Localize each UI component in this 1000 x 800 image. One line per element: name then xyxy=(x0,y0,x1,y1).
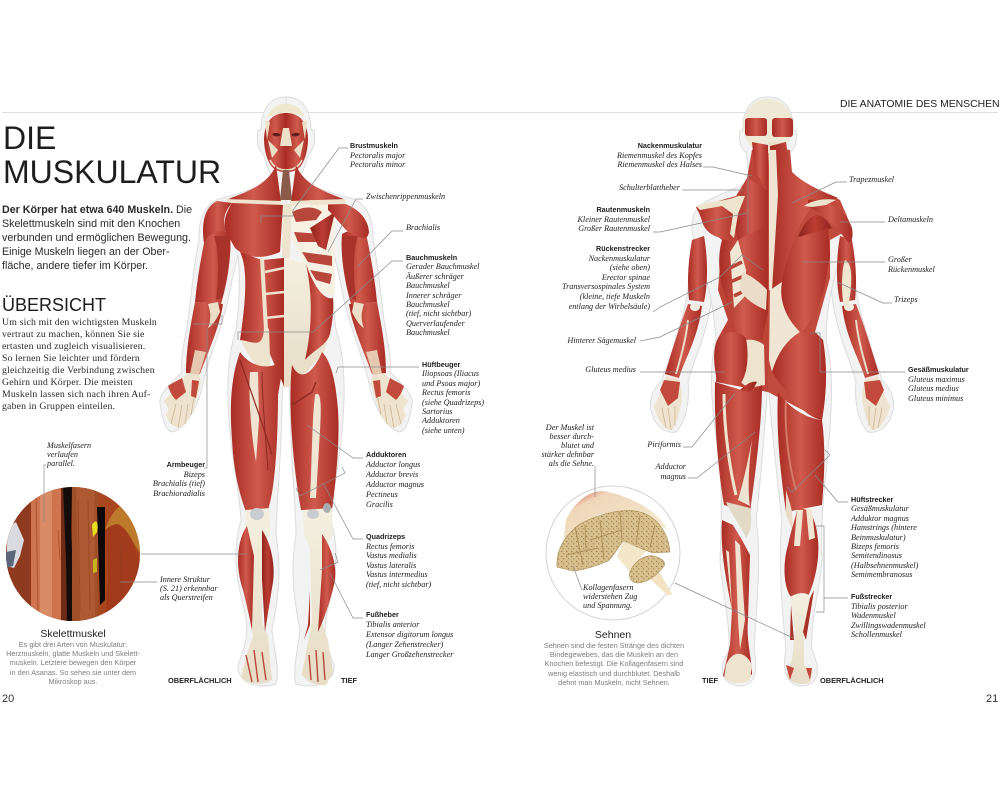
label: foot extensors: Tibialis posterior xyxy=(851,602,908,611)
label: foot extensors xyxy=(851,592,926,639)
label: hip extensors: Semimembranosus xyxy=(851,570,912,579)
intro text: verbunden und ermöglichen Bewegung. xyxy=(2,232,191,244)
label: abdominal muscles: Querverlaufender xyxy=(406,319,465,328)
label: muscle versus tendon xyxy=(541,423,594,468)
caption: tendons: Knochen befestigt. Die Kollagenfasern sind xyxy=(545,659,683,668)
caption: skeletal muscle: Es gibt drei Arten von Muskulatur: xyxy=(19,640,127,649)
label: gluteal muscles xyxy=(908,365,969,403)
label: serratus posterior: Hinterer Sägemuskel xyxy=(567,336,636,345)
label: adductors xyxy=(366,450,424,509)
caption: tendons: dehnt man Muskeln, nicht Sehnen. xyxy=(558,678,670,687)
label: collagen fibres: widerstehen Zug xyxy=(583,592,637,601)
label: muscle fibres: Muskelfasern xyxy=(47,441,91,450)
label: hip flexors: Iliopsoas (Iliacus xyxy=(422,369,479,378)
tendon illustration in circle xyxy=(546,486,680,620)
caption: skeletal muscle: Herzmuskeln, glatte Muskeln und Skelett- xyxy=(6,649,140,658)
label: erector spinae xyxy=(562,244,650,311)
label: hip extensors: Hüftstrecker xyxy=(851,495,893,504)
label: rhomboids: Rautenmuskeln xyxy=(596,205,650,214)
overview text: gaben in Gruppen einteilen. xyxy=(2,401,115,412)
label: quadriceps xyxy=(366,532,431,589)
label: chest muscles: Pectoralis minor xyxy=(350,160,405,169)
right leg, back view xyxy=(777,392,824,684)
label: hip flexors: Rectus femoris xyxy=(422,388,470,397)
front body figure: superficial and deep muscles xyxy=(159,96,413,686)
label: hip extensors: Semitendinosus xyxy=(851,551,902,560)
label: muscle versus tendon: besser durch- xyxy=(550,432,594,441)
heading: overview: ÜBERSICHT xyxy=(2,295,106,315)
silhouette halo xyxy=(160,97,412,686)
label: chest muscles: Pectoralis major xyxy=(350,151,405,160)
label: inner structure: als Querstreifen xyxy=(160,593,213,602)
label: brachialis: Brachialis xyxy=(406,223,440,232)
label: foot lifters: Langer Großzehenstrecker xyxy=(366,650,453,659)
label: triceps: Trizeps xyxy=(894,295,918,304)
overview text: gleichzeitig die Verbindung zwischen xyxy=(2,365,155,376)
head and neck xyxy=(743,99,793,190)
label: hip extensors: Hamstrings (hintere xyxy=(851,523,917,532)
label: muscle versus tendon: blutet und xyxy=(561,441,594,450)
caption: tendons: Sehnen sind die festen Stränge des dichten xyxy=(544,641,684,650)
heading: skeletal muscle: Skelettmuskel xyxy=(40,628,106,640)
caption: tendons: Bindegewebes, das die Muskeln an den xyxy=(550,650,678,659)
label: foot lifters xyxy=(366,610,454,659)
label: abdominal muscles: Äußerer schräger xyxy=(406,272,464,281)
label: hip flexors: Adduktoren xyxy=(422,416,460,425)
back body figure: deep and superficial muscles xyxy=(650,96,894,686)
intro text: Skelettmuskeln sind mit den Knochen xyxy=(2,218,180,230)
tendon cross-section xyxy=(557,511,670,571)
running head: DIE ANATOMIE DES MENSCHEN xyxy=(840,99,1000,110)
label: levator scapulae: Schulterblattheber xyxy=(619,183,680,192)
label: hip extensors: (Halbsehnenmuskel) xyxy=(851,561,918,570)
head and neck xyxy=(226,104,346,207)
label: muscle versus tendon: Der Muskel ist xyxy=(546,423,594,432)
label: adductor magnus: magnus xyxy=(661,472,686,481)
tag: superficial, front: OBERFLÄCHLICH xyxy=(168,676,232,685)
arms xyxy=(654,236,890,430)
label: hip extensors: Gesäßmuskulatur xyxy=(851,504,909,513)
overview text: Muskeln lassen sich nach ihren Auf- xyxy=(2,389,150,400)
label: quadriceps: (tief, nicht sichtbar) xyxy=(366,580,431,589)
label: latissimus xyxy=(888,255,935,274)
overview text: ertasten und zugleich visualisieren. xyxy=(2,341,145,352)
label: adductors: Adductor longus xyxy=(366,460,420,469)
label: foot extensors: Fußstrecker xyxy=(851,592,892,601)
label: gluteal muscles: Gluteus maximus xyxy=(908,375,965,384)
label: erector spinae: Nackenmuskulatur xyxy=(589,254,650,263)
caption: skeletal muscle xyxy=(6,640,140,686)
label: intercostal: Zwischenrippenmuskeln xyxy=(366,192,445,201)
left thigh and lower leg xyxy=(231,352,284,684)
label: quadriceps: Vastus medialis xyxy=(366,551,417,560)
label: adductors: Gracilis xyxy=(366,500,393,509)
photo circle: skeletal muscle microscopy xyxy=(6,487,140,621)
label: neck muscles xyxy=(617,141,702,169)
label: abdominal muscles: (tief, nicht sichtbar) xyxy=(406,309,471,318)
label: gluteal muscles: Gluteus minimus xyxy=(908,394,963,403)
label: foot lifters: (Langer Zehenstrecker) xyxy=(366,640,443,649)
label: abdominal muscles: Bauchmuskel xyxy=(406,300,450,309)
label: adductor magnus: Adductor xyxy=(656,462,686,471)
label: abdominal muscles: Innerer schräger xyxy=(406,291,461,300)
label: hip flexors: Sartorius xyxy=(422,407,452,416)
label: adductors: Adductor brevis xyxy=(366,470,418,479)
silhouette halo xyxy=(650,97,894,686)
label: foot extensors: Zwillingswadenmuskel xyxy=(851,621,926,630)
label: collagen fibres xyxy=(582,583,638,610)
title xyxy=(3,120,221,190)
label: erector spinae: Transversospinales System xyxy=(562,282,650,291)
label: adductors: Adduktoren xyxy=(366,450,406,459)
overview text: Um sich mit den wichtigsten Muskeln xyxy=(2,317,157,328)
label: erector spinae: entlang der Wirbelsäule) xyxy=(569,302,650,311)
tag: deep, back: TIEF xyxy=(702,676,718,685)
label: abdominal muscles xyxy=(406,253,480,337)
label: neck muscles: Riemenmuskel des Kopfes xyxy=(617,151,702,160)
label: foot lifters: Tibialis anterior xyxy=(366,620,419,629)
abdomen xyxy=(240,252,333,388)
label: erector spinae: (kleine, tiefe Muskeln xyxy=(580,292,650,301)
overview text: So lernen Sie leichter und fördern xyxy=(2,353,140,364)
label: erector spinae: (siehe oben) xyxy=(610,263,650,272)
label: piriformis: Piriformis xyxy=(647,440,681,449)
header rule xyxy=(2,112,998,113)
left leg, back view xyxy=(715,382,762,683)
page number 21: 21 xyxy=(986,693,998,705)
label: quadriceps: Vastus lateralis xyxy=(366,561,416,570)
title: DIE xyxy=(3,120,56,156)
shoulders and chest xyxy=(203,200,369,296)
label: deltoid: Deltamuskeln xyxy=(888,215,933,224)
label: arm flexors: Armbeuger xyxy=(167,460,205,469)
overview text xyxy=(2,317,157,412)
label: quadriceps: Vastus intermedius xyxy=(366,570,428,579)
label: neck muscles: Riemenmuskel des Halses xyxy=(617,160,702,169)
label: abdominal muscles: Gerader Bauchmuskel xyxy=(406,262,479,271)
intro text: Einige Muskeln liegen an der Ober- xyxy=(2,246,170,258)
label: inner structure xyxy=(160,575,218,602)
label: foot lifters: Extensor digitorum longus xyxy=(366,630,453,639)
label: muscle fibres: verlaufen xyxy=(47,450,78,459)
label: muscle fibres xyxy=(46,441,91,468)
label: adductor magnus xyxy=(655,462,686,481)
label: foot lifters: Fußheber xyxy=(366,610,399,619)
label: collagen fibres: und Spannung. xyxy=(583,601,632,610)
label: hip flexors: Hüftbeuger xyxy=(422,360,460,369)
label: latissimus: Rückenmuskel xyxy=(888,265,935,274)
label: latissimus: Großer xyxy=(888,255,912,264)
label: chest muscles: Brustmuskeln xyxy=(350,141,398,150)
label: abdominal muscles: Bauchmuskeln xyxy=(406,253,457,262)
intro text: Der Körper hat etwa 640 Muskeln. Die xyxy=(2,204,192,216)
label: muscle versus tendon: stärker dehnbar xyxy=(541,450,594,459)
label: chest muscles xyxy=(350,141,406,169)
label: foot extensors: Schollenmuskel xyxy=(851,630,902,639)
intro text: fläche, andere tiefer im Körper. xyxy=(2,260,148,272)
label: arm flexors: Brachioradialis xyxy=(153,489,205,498)
intro text xyxy=(2,204,192,272)
label: muscle fibres: parallel. xyxy=(47,459,75,468)
label: hip extensors: Beinmuskulatur) xyxy=(851,533,906,542)
label: gluteus medius: Gluteus medius xyxy=(585,365,636,374)
label: gluteal muscles: Gluteus medius xyxy=(908,384,959,393)
arms xyxy=(163,231,409,428)
caption: tendons: wenig elastisch und durchblutet. Deshalb xyxy=(548,669,680,678)
label: abdominal muscles: Bauchmuskel xyxy=(406,328,450,337)
label: hip extensors xyxy=(850,495,918,579)
label: hip extensors: Bizeps femoris xyxy=(851,542,899,551)
label: trapezius: Trapezmuskel xyxy=(849,175,894,184)
label: adductors: Pectineus xyxy=(366,490,398,499)
label: rhomboids: Großer Rautenmuskel xyxy=(578,224,650,233)
overview text: vertraut zu machen, können Sie sie xyxy=(2,329,145,340)
label: arm flexors xyxy=(153,460,205,498)
label: arm flexors: Bizeps xyxy=(184,470,205,479)
overview text: Gehirn und Körper. Die meisten xyxy=(2,377,133,388)
label: quadriceps: Rectus femoris xyxy=(366,542,414,551)
page number 20: 20 xyxy=(2,693,14,705)
tag: deep, front: TIEF xyxy=(341,676,357,685)
label: hip extensors: Adduktor magnus xyxy=(851,514,909,523)
back muscles: deep side xyxy=(696,178,768,395)
caption: skeletal muscle: Mikroskop aus. xyxy=(49,677,97,686)
label: hip flexors: (siehe unten) xyxy=(422,426,465,435)
label: adductors: Adductor magnus xyxy=(366,480,424,489)
label: inner structure: (S. 21) erkennbar xyxy=(160,584,218,593)
label: rhomboids: Kleiner Rautenmuskel xyxy=(577,215,650,224)
label: muscle versus tendon: als die Sehne. xyxy=(549,459,594,468)
label: hip flexors xyxy=(422,360,484,435)
right thigh and lower leg xyxy=(290,352,339,685)
label: quadriceps: Quadrizeps xyxy=(366,532,405,541)
caption: skeletal muscle: in den Asanas. So sehen sie unter dem xyxy=(10,668,136,677)
label: hip flexors: (siehe Quadrizeps) xyxy=(422,398,484,407)
label: gluteal muscles: Gesäßmuskulatur xyxy=(908,365,969,374)
label: hip flexors: und Psoas major) xyxy=(422,379,480,388)
collagen bundle xyxy=(617,541,672,596)
torso base xyxy=(697,146,852,420)
label: neck muscles: Nackenmuskulatur xyxy=(638,141,702,150)
label: inner structure: Innere Struktur xyxy=(160,575,210,584)
label: collagen fibres: Kollagenfasern xyxy=(583,583,634,592)
tag: superficial, back: OBERFLÄCHLICH xyxy=(820,676,884,685)
label: arm flexors: Brachialis (tief) xyxy=(153,479,205,488)
heading: tendons: Sehnen xyxy=(595,629,631,641)
caption: tendons xyxy=(544,641,684,687)
label: rhomboids xyxy=(577,205,650,233)
title: MUSKULATUR xyxy=(3,154,221,190)
label: abdominal muscles: Bauchmuskel xyxy=(406,281,450,290)
label: erector spinae: Rückenstrecker xyxy=(596,244,650,253)
label: erector spinae: Erector spinae xyxy=(602,273,650,282)
label: foot extensors: Wadenmuskel xyxy=(851,611,896,620)
caption: skeletal muscle: muskeln. Letztere bewegen den Körper xyxy=(10,658,136,667)
tendon outer sheath xyxy=(563,491,668,545)
back muscles: superficial side xyxy=(769,142,853,420)
